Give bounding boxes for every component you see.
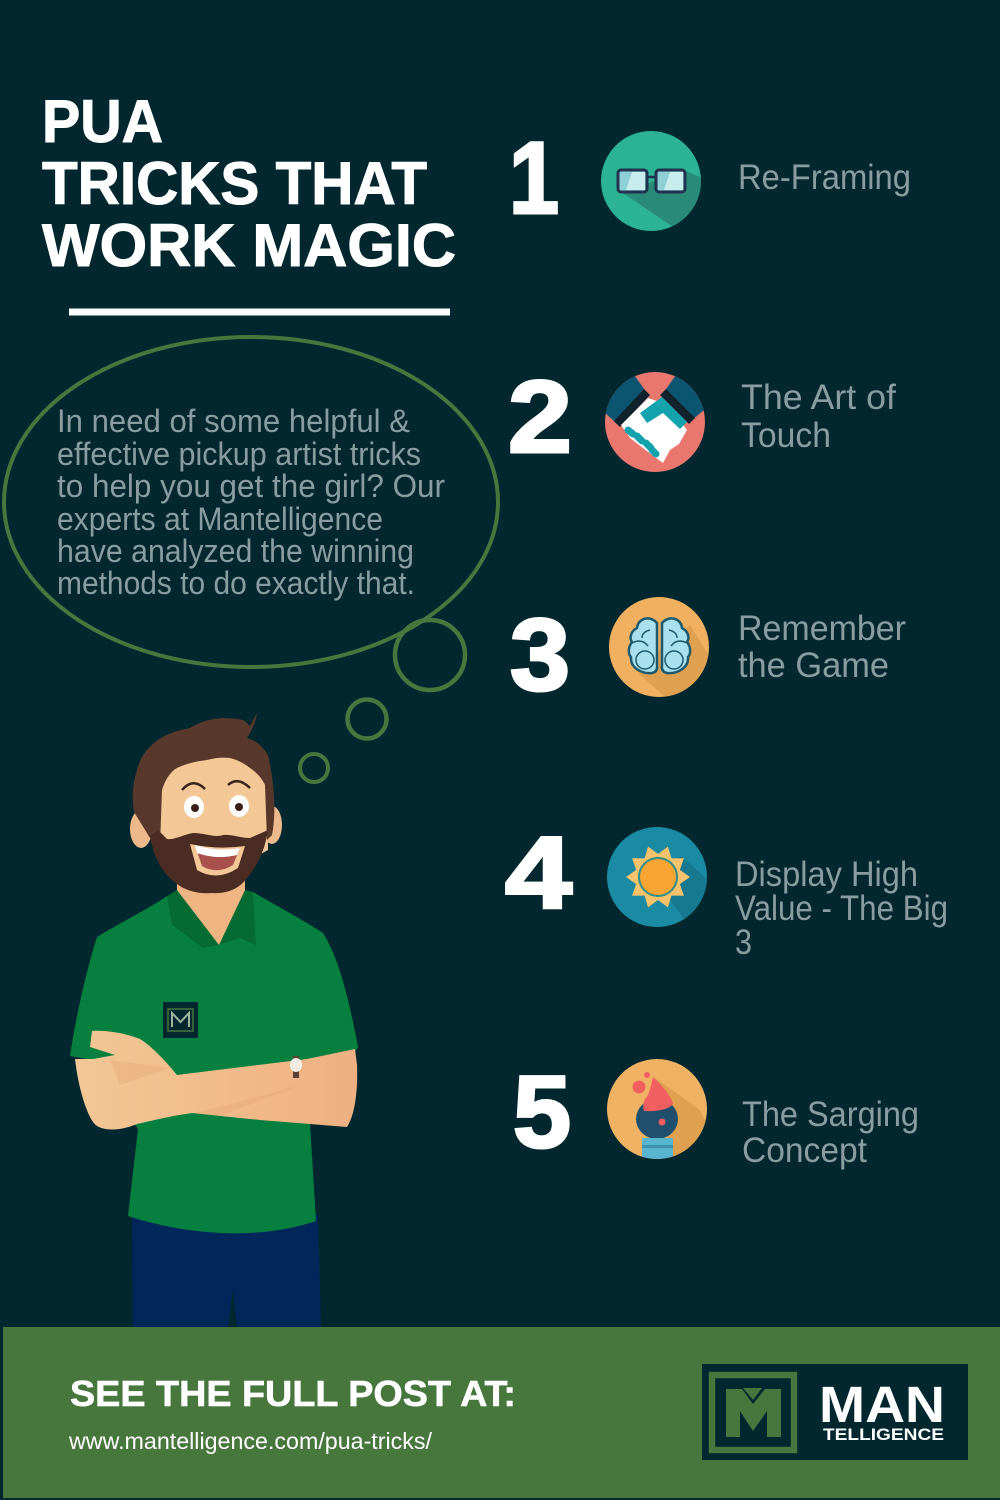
intro paragraph: experts at Mantelligence (57, 501, 383, 537)
intro paragraph (57, 403, 445, 601)
number 3: 3 (510, 598, 570, 712)
thought bubble (4, 337, 498, 782)
label (738, 609, 906, 685)
item 2: The Art of Touch (510, 372, 896, 472)
number 1: 1 (509, 121, 559, 235)
face (158, 755, 268, 880)
title: PUA (42, 88, 163, 155)
label: Touch (741, 416, 831, 455)
label: the Game (738, 646, 889, 685)
label: Value - The Big (735, 889, 948, 928)
label: Display High (735, 855, 918, 894)
label (735, 855, 948, 962)
label: 3 (735, 923, 752, 962)
footer band (3, 1327, 1000, 1498)
collar (167, 890, 256, 948)
icon: brain (609, 597, 709, 697)
crossed arms (75, 1031, 357, 1130)
mouth (190, 844, 245, 876)
hair (133, 713, 274, 845)
wrist watch (290, 1056, 302, 1078)
item 3: Remember the Game (510, 597, 906, 697)
url: www.mantelligence.com/pua-tricks/ (68, 1428, 433, 1454)
icon: glasses (601, 131, 701, 231)
neck (177, 878, 245, 947)
logo (702, 1364, 968, 1460)
number 5: 5 (513, 1055, 571, 1169)
label (742, 1095, 919, 1170)
item 4: Display High Value (505, 827, 946, 954)
logo: TELLIGENCE (823, 1426, 944, 1444)
label: The Sarging (742, 1095, 919, 1134)
item 1: Re-Framing (513, 131, 909, 231)
label: Concept (742, 1131, 867, 1170)
beard (150, 830, 268, 893)
call to action heading: SEE THE FULL POST AT: (70, 1373, 516, 1414)
eyes (184, 795, 249, 818)
character: smiling bearded man (70, 713, 358, 1328)
intro paragraph: methods to do exactly that. (57, 565, 415, 601)
number 4: 4 (505, 816, 572, 930)
shirt badge (163, 1002, 198, 1038)
icon: handshake (600, 372, 710, 472)
label: Re-Framing (738, 158, 911, 197)
item 5: The Sarging Concept (513, 1055, 919, 1170)
intro paragraph: to help you get the girl? Our (57, 468, 445, 504)
logo: MAN (819, 1376, 945, 1433)
eyebrows (182, 781, 250, 790)
shirt (70, 892, 358, 1233)
label: The Art of (741, 378, 896, 417)
number 2: 2 (508, 360, 572, 474)
ears (130, 806, 282, 848)
title: TRICKS THAT (42, 150, 427, 217)
label (741, 378, 896, 455)
intro paragraph: effective pickup artist tricks (57, 436, 421, 472)
intro paragraph: have analyzed the winning (57, 533, 414, 569)
label: Remember (738, 609, 906, 648)
title: WORK MAGIC (42, 212, 456, 279)
icon: sun (607, 827, 707, 927)
title (42, 88, 456, 279)
icon: paint brush (607, 1059, 707, 1159)
pants (132, 1215, 321, 1328)
intro paragraph: In need of some helpful & (57, 403, 410, 439)
